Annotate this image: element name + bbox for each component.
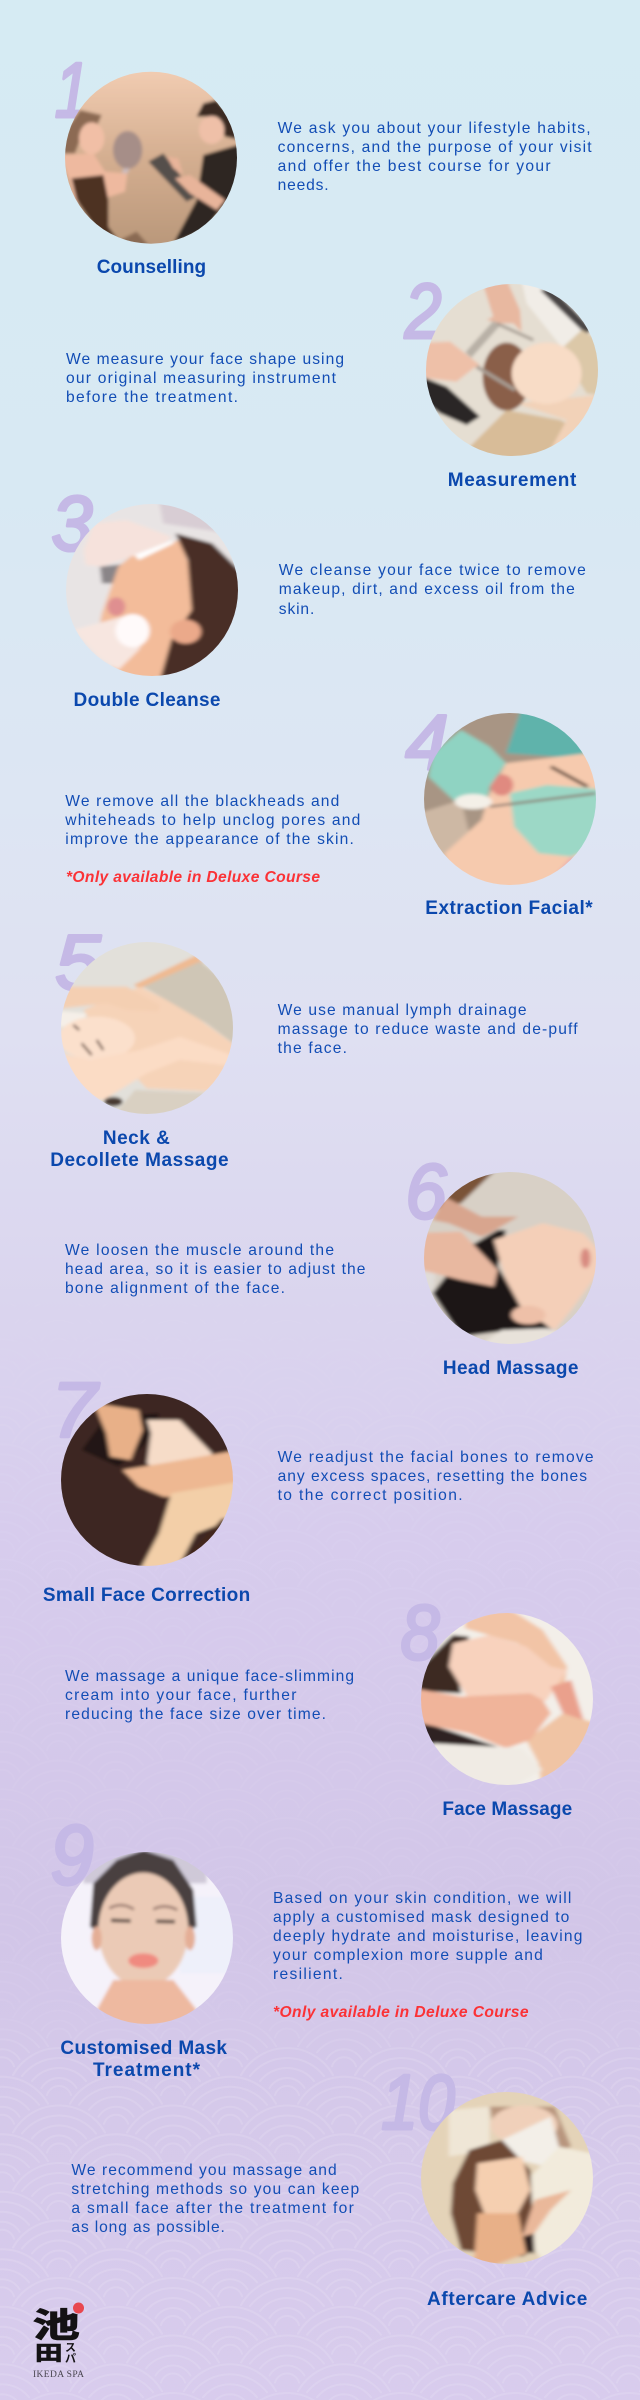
step 2: Measurement (66, 282, 598, 486)
heading: Aftercare Advice (427, 2289, 587, 2310)
description: to the correct position. (278, 1487, 463, 1504)
photo: small face correction (61, 1394, 233, 1566)
description (71, 2162, 360, 2236)
description: as long as possible. (71, 2219, 225, 2236)
description: We ask you about your lifestyle habits, (278, 120, 591, 137)
description: whiteheads to help unclog pores and (64, 812, 360, 829)
description: cream into your face, further (65, 1687, 296, 1704)
deluxe note: *Only available in Deluxe Course (273, 2004, 529, 2021)
description: deeply hydrate and moisturise, leaving (273, 1928, 582, 1945)
number 7: 7 (51, 1367, 99, 1454)
logo red seal (73, 2302, 84, 2314)
logo kanji second: 田 (35, 2337, 62, 2366)
photo: extraction facial (424, 713, 596, 885)
description (65, 1668, 354, 1723)
description: makeup, dirt, and excess oil from the (279, 581, 575, 598)
description: We measure your face shape using (66, 351, 344, 368)
description: and offer the best course for your (278, 158, 551, 175)
heading: Measurement (448, 470, 577, 491)
photo: aftercare advice (421, 2092, 593, 2264)
deluxe note: *Only available in Deluxe Course (66, 869, 320, 886)
logo katakana: パ (65, 2350, 76, 2366)
description: our original measuring instrument (66, 370, 337, 387)
logo wordmark: IKEDA SPA (33, 2370, 84, 2380)
description: head area, so it is easier to adjust the (65, 1261, 365, 1278)
heading: Extraction Facial* (425, 898, 593, 919)
description: before the treatment. (66, 389, 238, 406)
description: We readjust the facial bones to remove (278, 1449, 594, 1466)
description: concerns, and the purpose of your visit (278, 139, 592, 156)
logo: Ikeda Spa (33, 2298, 84, 2380)
photo: neck massage (61, 942, 233, 1114)
step 3: Double Cleanse (49, 480, 586, 711)
step 9: Customised Mask Treatment (47, 1809, 582, 2081)
step 7: Small Face Correction (43, 1367, 594, 1606)
heading (60, 2038, 227, 2081)
logo kanji: 池 (33, 2298, 80, 2347)
logo katakana (65, 2339, 76, 2366)
description: We loosen the muscle around the (65, 1242, 334, 1259)
description: a small face after the treatment for (71, 2200, 354, 2217)
description: your complexion more supple and (273, 1947, 543, 1964)
number 3: 3 (51, 480, 93, 567)
description (279, 562, 586, 618)
description: the face. (278, 1040, 347, 1057)
photo: customised mask (61, 1852, 233, 2024)
description (278, 1449, 594, 1504)
description: massage to reduce waste and de-puff (278, 1021, 578, 1038)
description (65, 1242, 365, 1297)
number 6: 6 (405, 1148, 447, 1235)
step 8: Face Massage (65, 1589, 608, 1820)
step 4: Extraction Facial (65, 713, 596, 914)
description: stretching methods so you can keep (71, 2181, 360, 2198)
logo katakana: ス (65, 2339, 76, 2355)
step 1: Counselling (50, 46, 592, 278)
photo: head massage (424, 1172, 596, 1344)
description: We cleanse your face twice to remove (279, 562, 586, 579)
description: needs. (278, 177, 329, 194)
step 6: Head Massage (65, 1148, 612, 1379)
heading: Face Massage (442, 1799, 572, 1820)
number 9: 9 (50, 1809, 94, 1903)
heading: Counselling (97, 257, 206, 278)
description (278, 120, 592, 194)
number 4: 4 (405, 698, 449, 786)
heading: Decollete Massage (50, 1150, 229, 1171)
heading: Treatment* (93, 2060, 201, 2081)
heading: Small Face Correction (43, 1585, 250, 1606)
description (278, 1002, 578, 1057)
number 1: 1 (55, 46, 89, 134)
description (66, 351, 344, 406)
description: bone alignment of the face. (65, 1280, 285, 1297)
description: We use manual lymph drainage (278, 1002, 527, 1019)
description (64, 793, 360, 848)
description: Based on your skin condition, we will (273, 1890, 571, 1907)
description: apply a customised mask designed to (273, 1909, 570, 1926)
description: We remove all the blackheads and (65, 793, 339, 810)
description: reducing the face size over time. (65, 1706, 326, 1723)
description: any excess spaces, resetting the bones (278, 1468, 587, 1485)
number 5: 5 (55, 919, 101, 1006)
photo: face massage (421, 1613, 593, 1785)
number 10: 10 (381, 2059, 455, 2146)
description: resilient. (273, 1966, 343, 1983)
photo: counselling (65, 72, 237, 244)
heading (50, 1128, 229, 1171)
heading: Double Cleanse (74, 690, 220, 711)
number 2: 2 (404, 268, 441, 355)
photo: double cleanse (66, 504, 238, 676)
description: We massage a unique face-slimming (65, 1668, 354, 1685)
description (273, 1890, 582, 1983)
heading: Neck & (103, 1128, 170, 1149)
description: improve the appearance of the skin. (65, 831, 354, 848)
heading: Customised Mask (60, 2038, 227, 2059)
description: We recommend you massage and (71, 2162, 337, 2179)
number 8: 8 (400, 1589, 440, 1676)
step 10: Aftercare Advice (72, 2074, 593, 2305)
heading: Head Massage (443, 1358, 578, 1379)
description: skin. (279, 601, 314, 618)
step 5: Neck and Decollete Massage (47, 919, 578, 1171)
photo: measurement (426, 284, 598, 456)
